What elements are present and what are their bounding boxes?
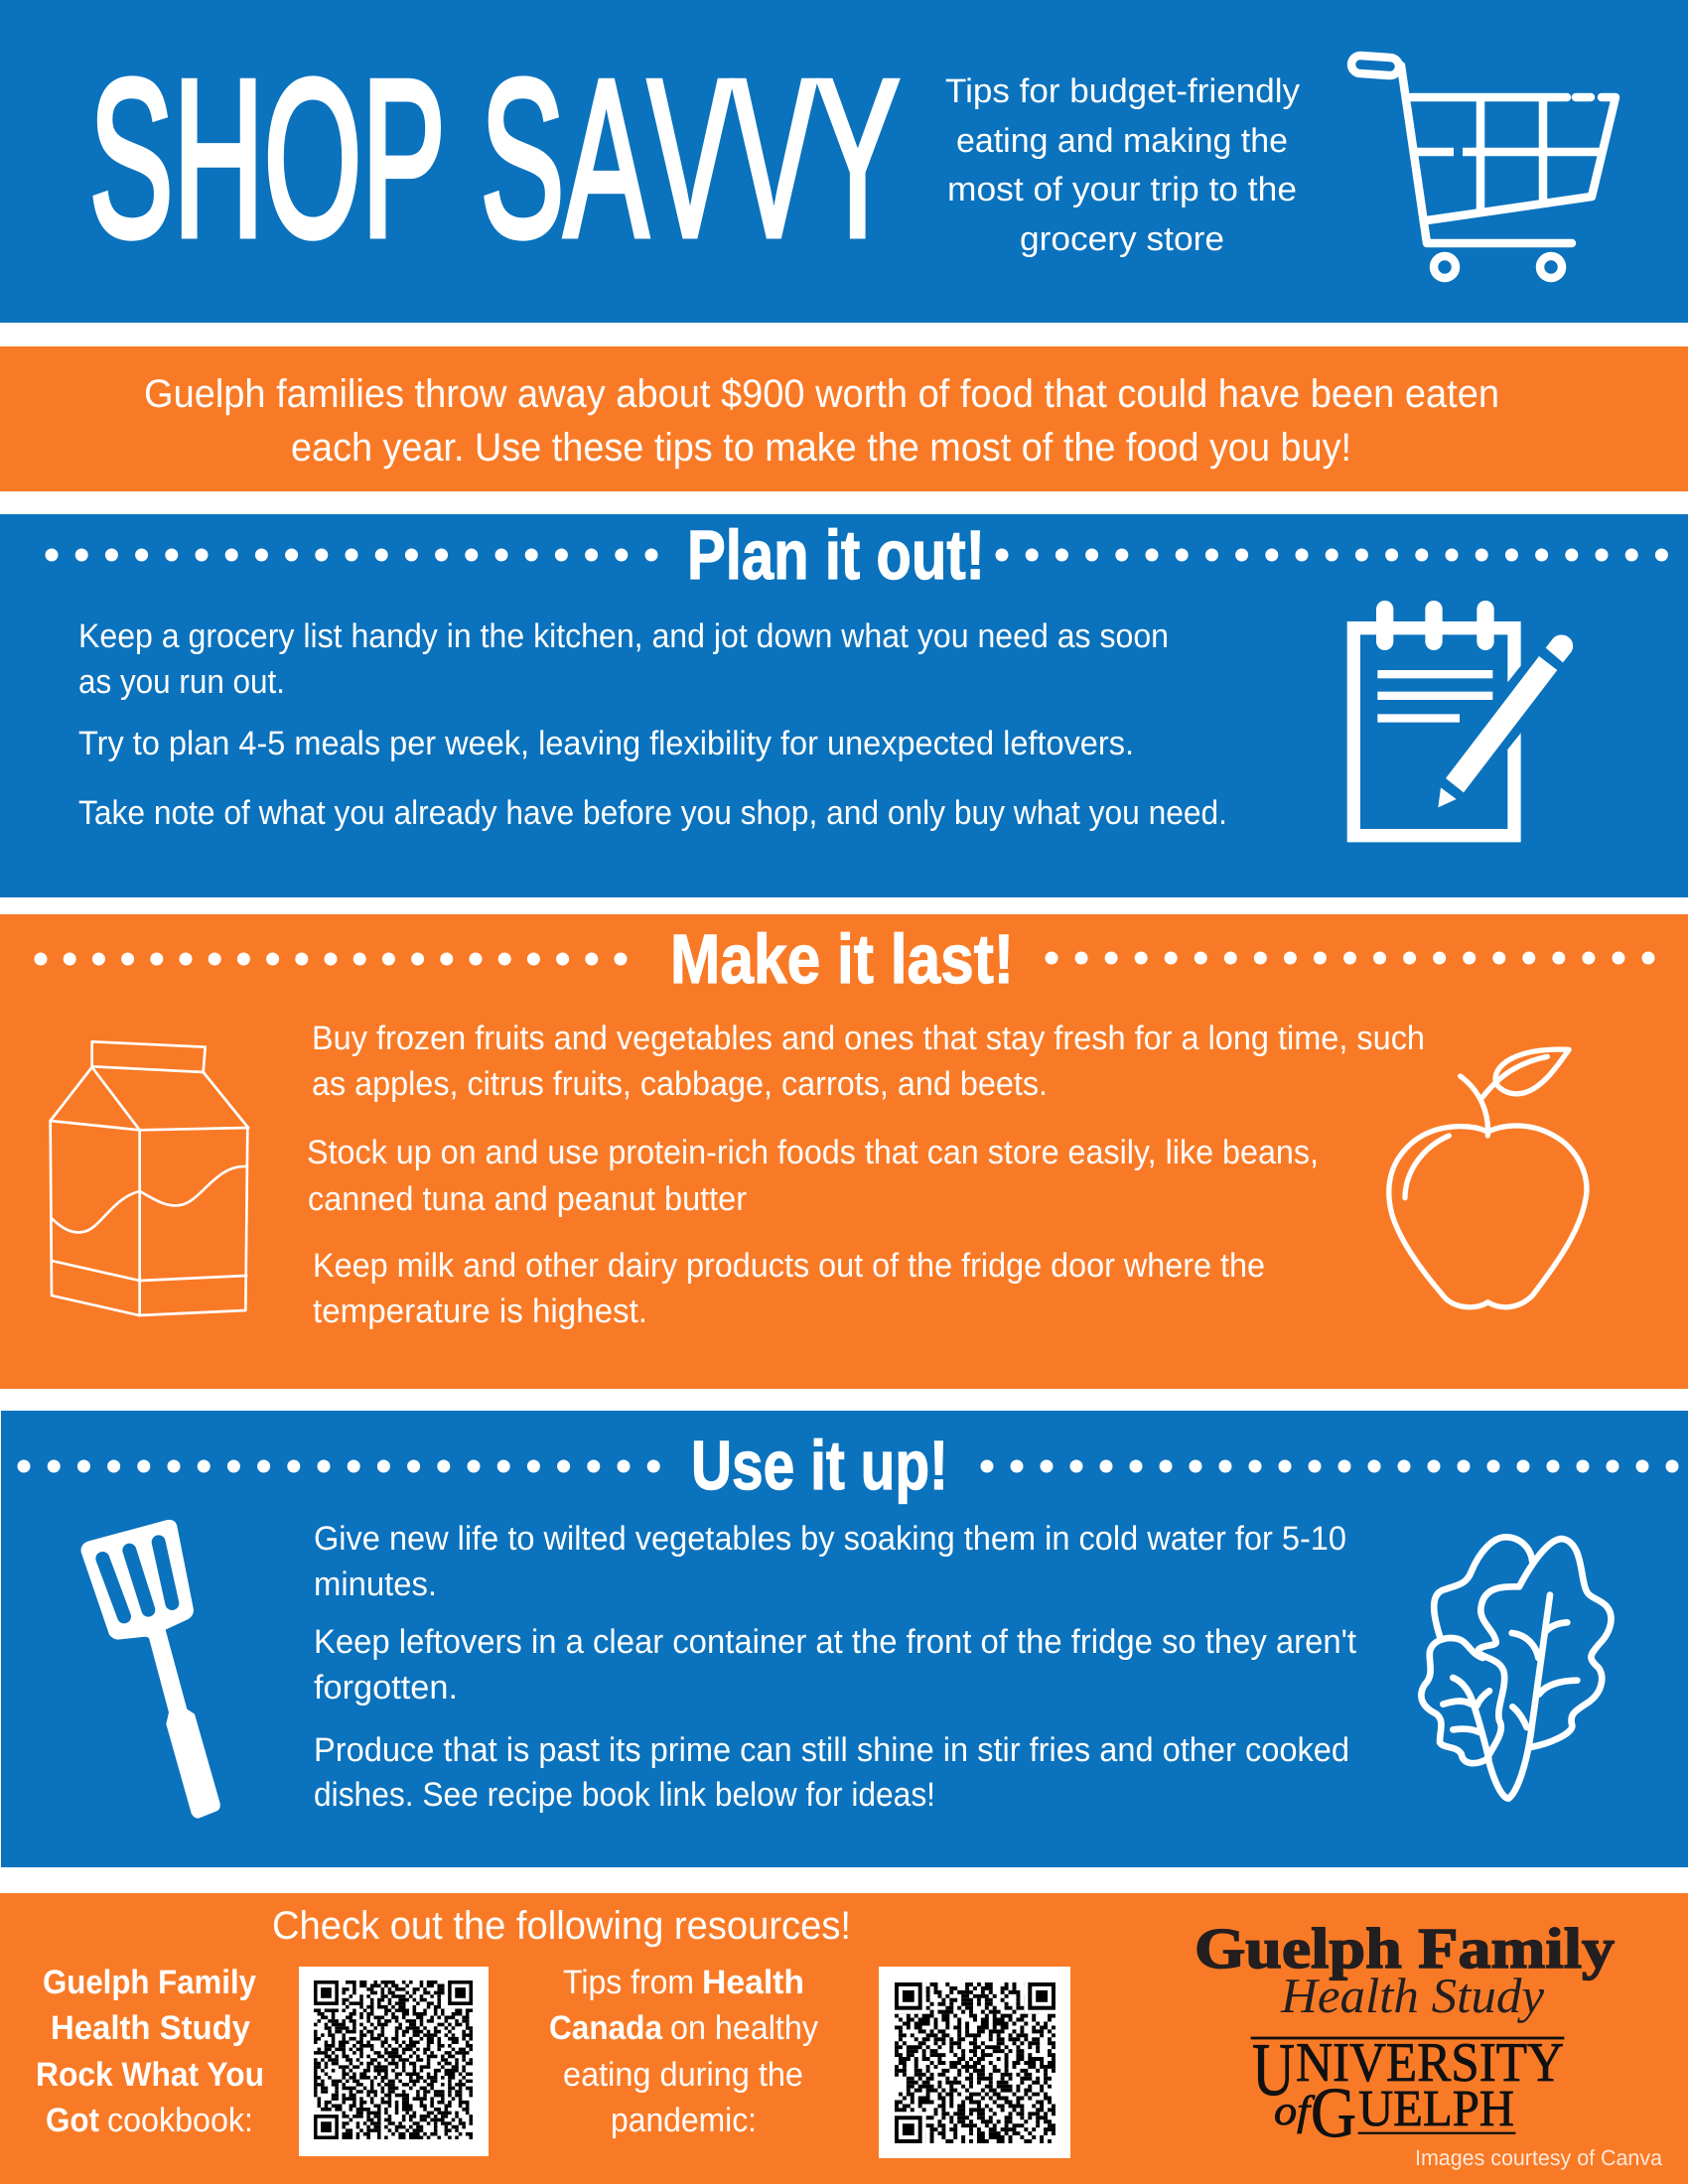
heading: make it last: Make it last! bbox=[670, 920, 1014, 998]
logo: University of Guelph: UELPH bbox=[1358, 2081, 1514, 2137]
tips: plan it out: Try to plan 4-5 meals per week, leaving flexibility for unexpected leftovers. bbox=[78, 725, 1134, 762]
tips: plan it out bbox=[78, 617, 1227, 832]
subtitle text: grocery store bbox=[1020, 220, 1224, 258]
Health Canada resource text: pandemic: bbox=[611, 2102, 757, 2139]
subtitle text bbox=[945, 72, 1300, 258]
cookbook resource text: Rock What You bbox=[36, 2056, 264, 2094]
heading: plan it out: Plan it out! bbox=[687, 516, 985, 594]
Health Canada resource text: on healthy bbox=[670, 2009, 818, 2047]
cookbook resource text: Health Study bbox=[51, 2009, 250, 2047]
logo: University of Guelph bbox=[1251, 2028, 1564, 2152]
resources heading: Check out the following resources! bbox=[272, 1904, 851, 1948]
Health Canada resource text: Health bbox=[702, 1964, 804, 2001]
logo: Guelph Family Health Study: Health Study bbox=[1280, 1968, 1545, 2023]
tips: make it last: canned tuna and peanut butter bbox=[308, 1180, 747, 1218]
Health Canada resource text: eating during the bbox=[563, 2056, 803, 2094]
panel: make it last bbox=[0, 914, 1688, 1389]
tips: make it last: temperature is highest. bbox=[313, 1293, 647, 1330]
title: SHOP SAVVY bbox=[89, 33, 900, 283]
panel: food waste intro banner: Guelph families throw away about $900 worth of food that could have been eaten bbox=[144, 372, 1499, 416]
tips: use it up: Keep leftovers in a clear container at the front of the fridge so they aren't bbox=[314, 1623, 1357, 1661]
cookbook resource text bbox=[36, 1964, 264, 2139]
tips: use it up bbox=[314, 1520, 1357, 1814]
tips: plan it out: as you run out. bbox=[78, 663, 285, 701]
logo: University of Guelph: of bbox=[1274, 2089, 1316, 2134]
panel: resources footer bbox=[0, 1893, 1688, 2184]
icon: spatula bbox=[81, 1520, 220, 1819]
logo: University of Guelph: G bbox=[1311, 2073, 1356, 2152]
icon: apple bbox=[1389, 1049, 1587, 1307]
tips: use it up: dishes. See recipe book link below for ideas! bbox=[314, 1776, 935, 1814]
tips: make it last: Buy frozen fruits and vegetables and ones that stay fresh for a long time, such bbox=[312, 1020, 1425, 1057]
image credit: Images courtesy of Canva bbox=[1415, 2145, 1663, 2170]
subtitle text: Tips for budget-friendly bbox=[945, 72, 1300, 110]
tips: make it last: as apples, citrus fruits, cabbage, carrots, and beets. bbox=[312, 1065, 1048, 1103]
tips: make it last: Stock up on and use protein-rich foods that can store easily, like beans, bbox=[307, 1134, 1319, 1171]
cookbook resource text: Guelph Family bbox=[43, 1964, 256, 2001]
heading: use it up: Use it up! bbox=[691, 1427, 948, 1504]
icon: shopping cart bbox=[1350, 55, 1616, 278]
panel: food waste intro banner: each year. Use these tips to make the most of the food you buy! bbox=[291, 426, 1351, 470]
tips: plan it out: Take note of what you already have before you shop, and only buy what you need. bbox=[78, 794, 1227, 832]
panel: plan it out bbox=[0, 514, 1688, 897]
logo: University of Guelph: U bbox=[1252, 2028, 1295, 2112]
Health Canada resource text bbox=[549, 1964, 818, 2139]
panel: food waste intro banner bbox=[0, 346, 1688, 491]
QR code: Health Canada bbox=[879, 1967, 1070, 2158]
icon: milk carton bbox=[51, 1041, 248, 1315]
panel: use it up bbox=[1, 1411, 1688, 1867]
cookbook resource text: cookbook: bbox=[107, 2102, 253, 2139]
logo: Guelph Family Health Study bbox=[1195, 1916, 1615, 2023]
subtitle text: most of your trip to the bbox=[947, 171, 1297, 208]
cookbook resource text: Got bbox=[46, 2102, 99, 2139]
panel: header bbox=[0, 0, 1688, 323]
logo: Guelph Family Health Study: Guelph Family bbox=[1195, 1916, 1615, 1980]
Health Canada resource text: Tips from bbox=[563, 1964, 694, 2001]
tips: use it up: Give new life to wilted vegetables by soaking them in cold water for 5-10 bbox=[314, 1520, 1346, 1558]
icon: leafy greens bbox=[1421, 1537, 1611, 1799]
QR code: cookbook bbox=[299, 1967, 489, 2156]
tips: use it up: minutes. bbox=[314, 1566, 437, 1603]
tips: use it up: forgotten. bbox=[314, 1669, 458, 1706]
tips: plan it out: Keep a grocery list handy in the kitchen, and jot down what you need as soon bbox=[78, 617, 1169, 655]
tips: make it last bbox=[307, 1020, 1425, 1330]
logo: University of Guelph: NIVERSITY bbox=[1296, 2032, 1564, 2094]
tips: make it last: Keep milk and other dairy products out of the fridge door where the bbox=[313, 1247, 1265, 1285]
subtitle text: eating and making the bbox=[956, 122, 1288, 160]
tips: use it up: Produce that is past its prime can still shine in stir fries and other cooked bbox=[314, 1731, 1349, 1769]
icon: notepad and pencil bbox=[1347, 601, 1573, 842]
Health Canada resource text: Canada bbox=[549, 2009, 663, 2047]
